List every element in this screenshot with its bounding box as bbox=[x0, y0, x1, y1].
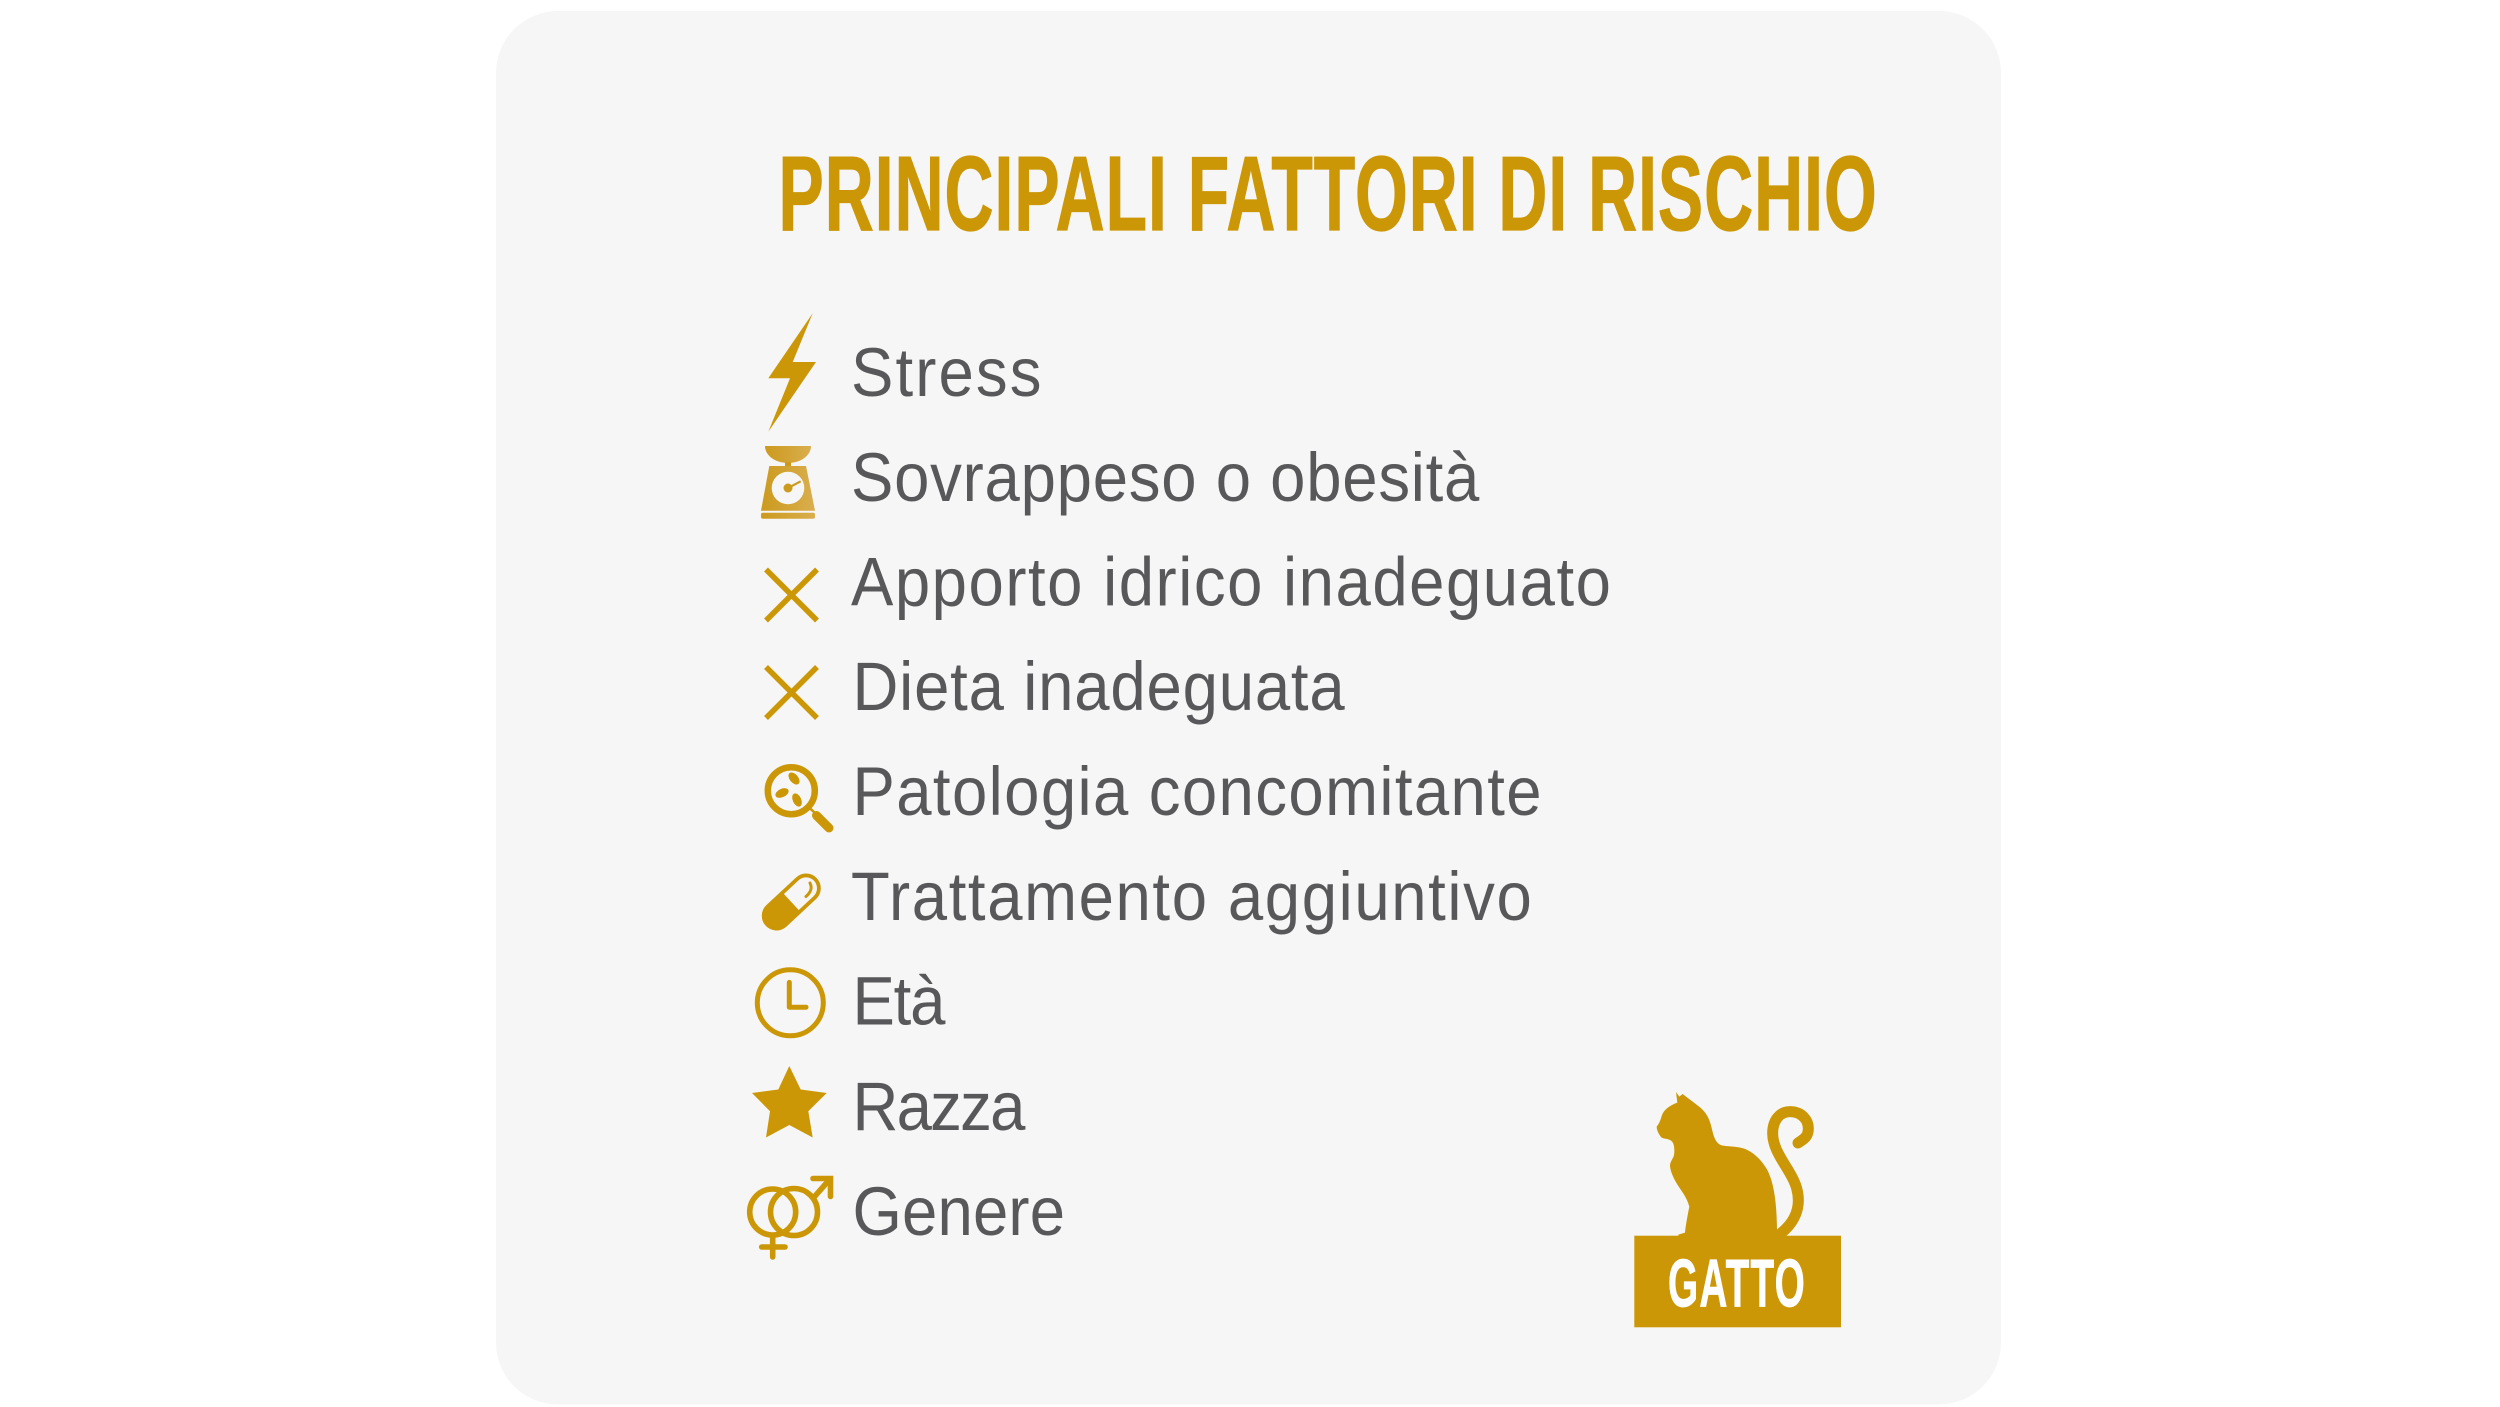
label: Sovrappeso o obesità: Sovrappeso o obesità bbox=[851, 440, 1479, 517]
icon: clock bbox=[757, 970, 823, 1036]
label: Razza: Razza bbox=[852, 1069, 1026, 1146]
label: Trattamento aggiuntivo: Trattamento aggiuntivo bbox=[851, 859, 1532, 936]
icon: gender symbols bbox=[750, 1178, 830, 1257]
icon: capsule bbox=[756, 869, 825, 936]
icon: sitting cat bbox=[1657, 1092, 1808, 1236]
label: Genere: Genere bbox=[852, 1174, 1065, 1251]
label: Apporto idrico inadeguato: Apporto idrico inadeguato bbox=[851, 544, 1611, 621]
icon: cross bbox=[766, 570, 817, 620]
label box bbox=[1634, 1236, 1841, 1327]
label: Età: Età bbox=[852, 963, 946, 1040]
icon: kitchen scale bbox=[761, 446, 815, 519]
label: Patologia concomitante: Patologia concomitante bbox=[852, 754, 1542, 831]
icon: star bbox=[752, 1066, 827, 1138]
label: GATTO: GATTO bbox=[1668, 1245, 1805, 1321]
icon: magnifier with bacteria bbox=[768, 767, 829, 828]
label: Dieta inadeguata: Dieta inadeguata bbox=[852, 649, 1345, 726]
title: PRINCIPALI FATTORI DI RISCHIO bbox=[778, 134, 1877, 253]
panel: risk factors card bbox=[496, 11, 2001, 1404]
badge: cat with GATTO label bbox=[1634, 1092, 1841, 1327]
label: Stress: Stress bbox=[851, 335, 1041, 412]
icon: lightning bolt bbox=[768, 313, 816, 432]
icon: cross bbox=[766, 667, 817, 718]
